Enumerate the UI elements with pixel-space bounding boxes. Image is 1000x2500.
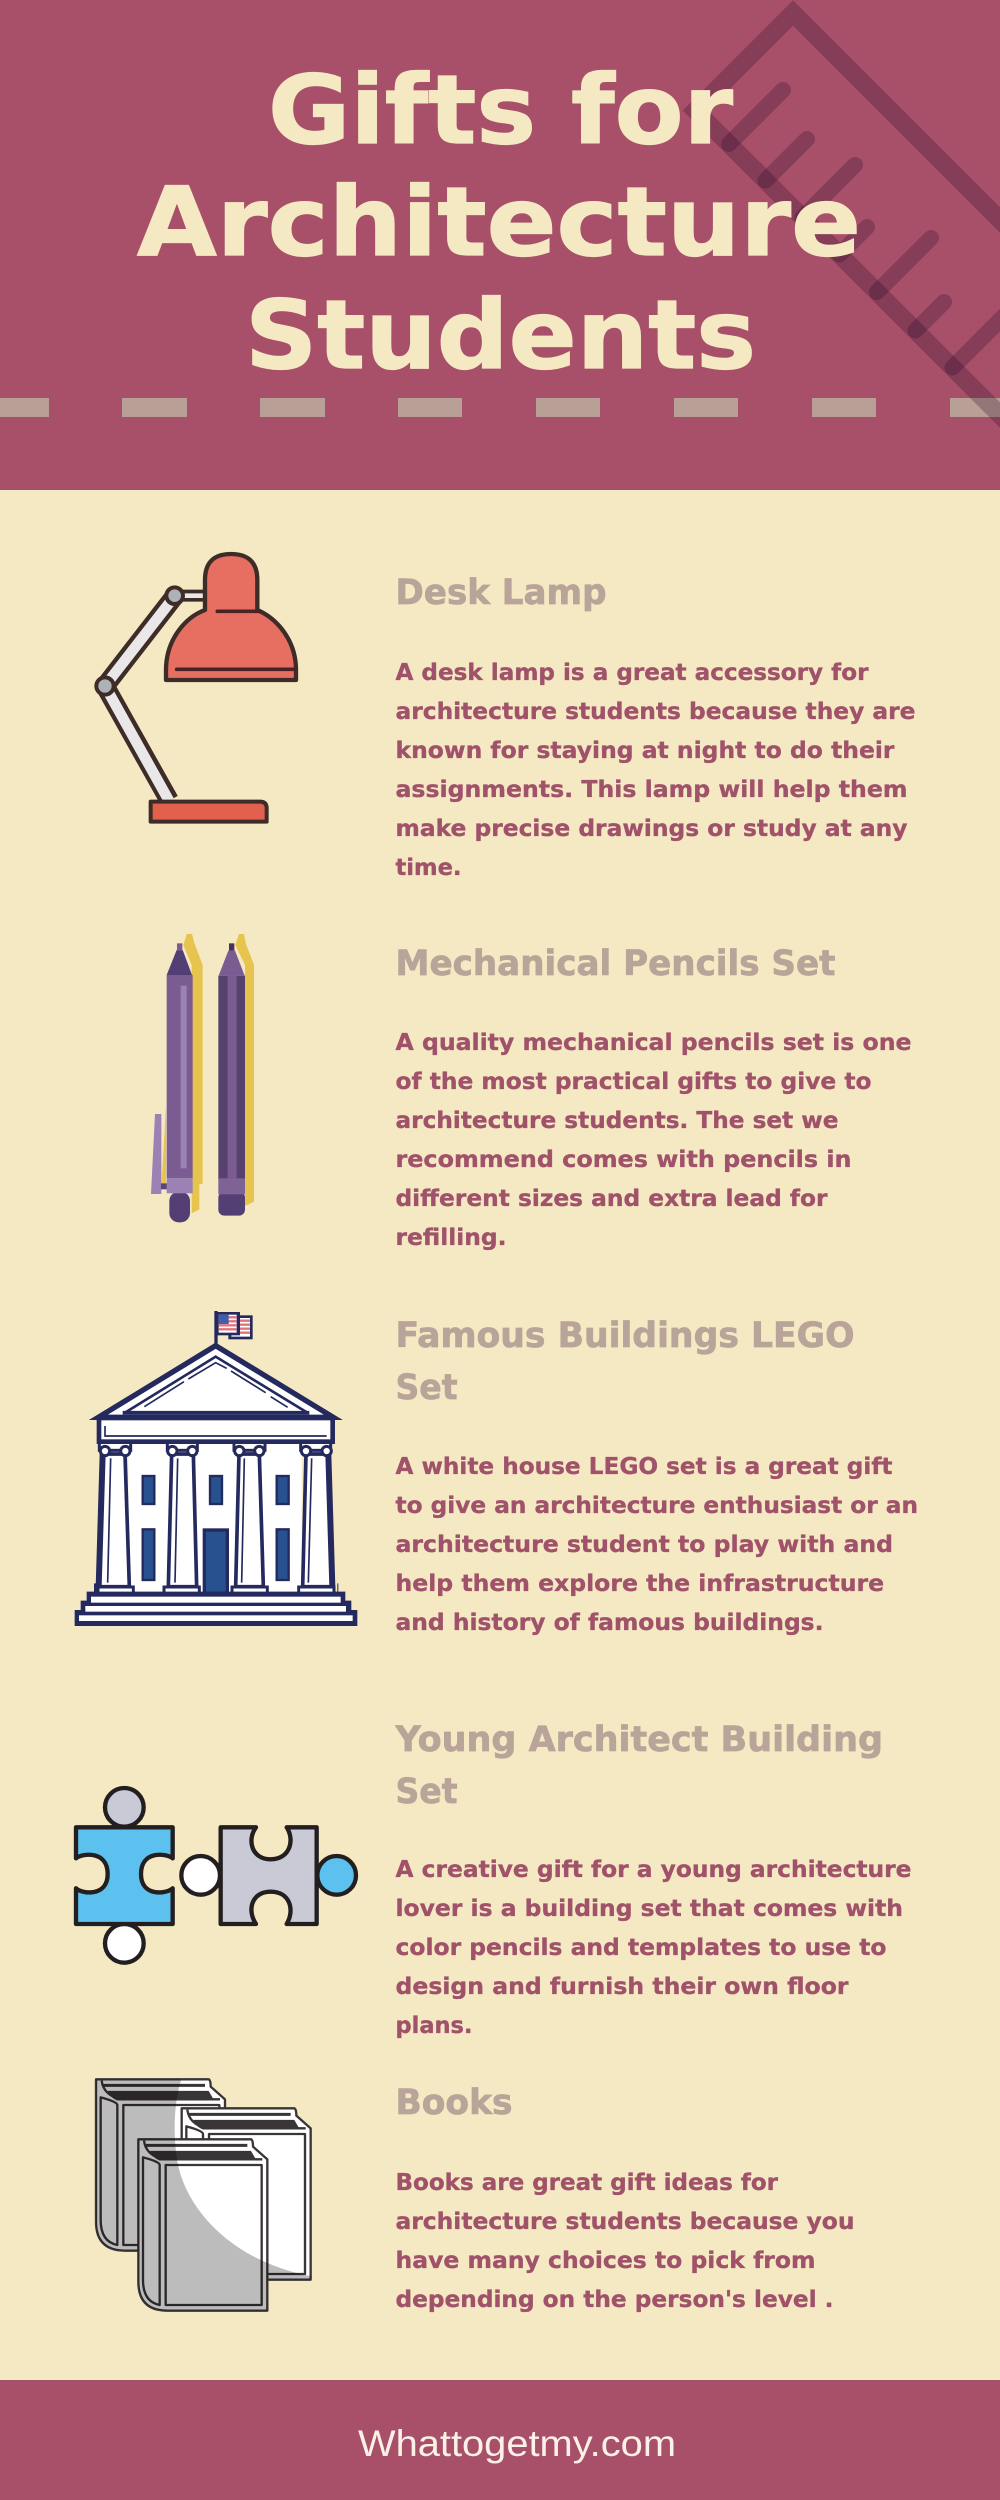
capitals: [99, 1442, 331, 1456]
title: [137, 56, 861, 391]
title: Architecture: [137, 168, 861, 278]
columns: [99, 1454, 332, 1587]
flag: [214, 1311, 253, 1345]
book back right: [182, 2108, 311, 2280]
text: mechanical pencils: of the most practical gifts to give to: [396, 1069, 872, 1095]
title: Gifts for: [268, 56, 733, 166]
text: desk lamp: time.: [396, 855, 462, 881]
text: LEGO set: to give an architecture enthusiast or an: [396, 1493, 918, 1519]
text: desk lamp: assignments. This lamp will help them: [396, 777, 908, 803]
text: building set: color pencils and templates to use to: [396, 1935, 886, 1961]
text: books: Books are great gift ideas for: [396, 2170, 779, 2196]
column bases: [98, 1587, 334, 1595]
text: desk lamp: make precise drawings or study at any: [396, 816, 908, 842]
icon: ruler watermark: [696, 13, 1000, 455]
footer: [0, 2380, 1000, 2500]
text: building set: [395, 1720, 911, 2039]
icon: books: [93, 2073, 313, 2320]
text: mechanical pencils: refilling.: [396, 1225, 506, 1251]
book back left: [96, 2079, 225, 2251]
roof pediment: [98, 1346, 333, 1442]
text: desk lamp: architecture students because they are: [396, 699, 916, 725]
text: desk lamp: A desk lamp is a great accessory for: [396, 660, 869, 686]
text: LEGO set: Set: [396, 1368, 458, 1408]
text: building set: plans.: [396, 2013, 472, 2039]
text: mechanical pencils: architecture students. The set we: [396, 1108, 838, 1134]
text: mechanical pencils: different sizes and extra lead for: [396, 1186, 828, 1212]
book front: [138, 2139, 267, 2311]
title: Students: [245, 281, 756, 391]
icon: puzzle pieces: [76, 1788, 356, 1963]
text: building set: Young Architect Building: [395, 1720, 883, 1760]
text: LEGO set: [396, 1316, 918, 1636]
text: books: [396, 2083, 854, 2313]
text: LEGO set: Famous Buildings LEGO: [396, 1316, 854, 1356]
text: building set: A creative gift for a young architecture: [396, 1857, 912, 1883]
icon: desk lamp: [96, 554, 296, 822]
text: building set: lover is a building set that comes with: [396, 1896, 903, 1922]
text: LEGO set: and history of famous buildings.: [396, 1610, 824, 1636]
windows and door: [143, 1476, 289, 1595]
steps: [75, 1583, 357, 1626]
text: mechanical pencils: recommend comes with pencils in: [396, 1147, 852, 1173]
footer: Whattogetmy.com: [358, 2423, 676, 2464]
dashed line: [0, 398, 1000, 417]
text: mechanical pencils: A quality mechanical pencils set is one: [396, 1030, 912, 1056]
text: LEGO set: A white house LEGO set is a great gift: [396, 1454, 892, 1480]
text: building set: Set: [396, 1772, 458, 1812]
text: mechanical pencils: [396, 944, 912, 1251]
text: desk lamp: Desk Lamp: [396, 573, 606, 613]
text: desk lamp: [396, 573, 916, 881]
text: mechanical pencils: Mechanical Pencils Set: [396, 944, 836, 984]
text: desk lamp: known for staying at night to do their: [396, 738, 895, 764]
header banner: [0, 0, 1000, 490]
text: books: depending on the person's level .: [396, 2287, 834, 2313]
main wall: [128, 1442, 302, 1595]
text: LEGO set: architecture student to play with and: [396, 1532, 893, 1558]
icon: white house building: [75, 1311, 357, 1626]
icon: mechanical pencils: [151, 934, 254, 1222]
text: LEGO set: help them explore the infrastructure: [396, 1571, 884, 1597]
text: books: architecture students because you: [396, 2209, 854, 2235]
text: building set: design and furnish their own floor: [396, 1974, 849, 2000]
text: books: have many choices to pick from: [396, 2248, 816, 2274]
text: books: Books: [396, 2083, 512, 2123]
